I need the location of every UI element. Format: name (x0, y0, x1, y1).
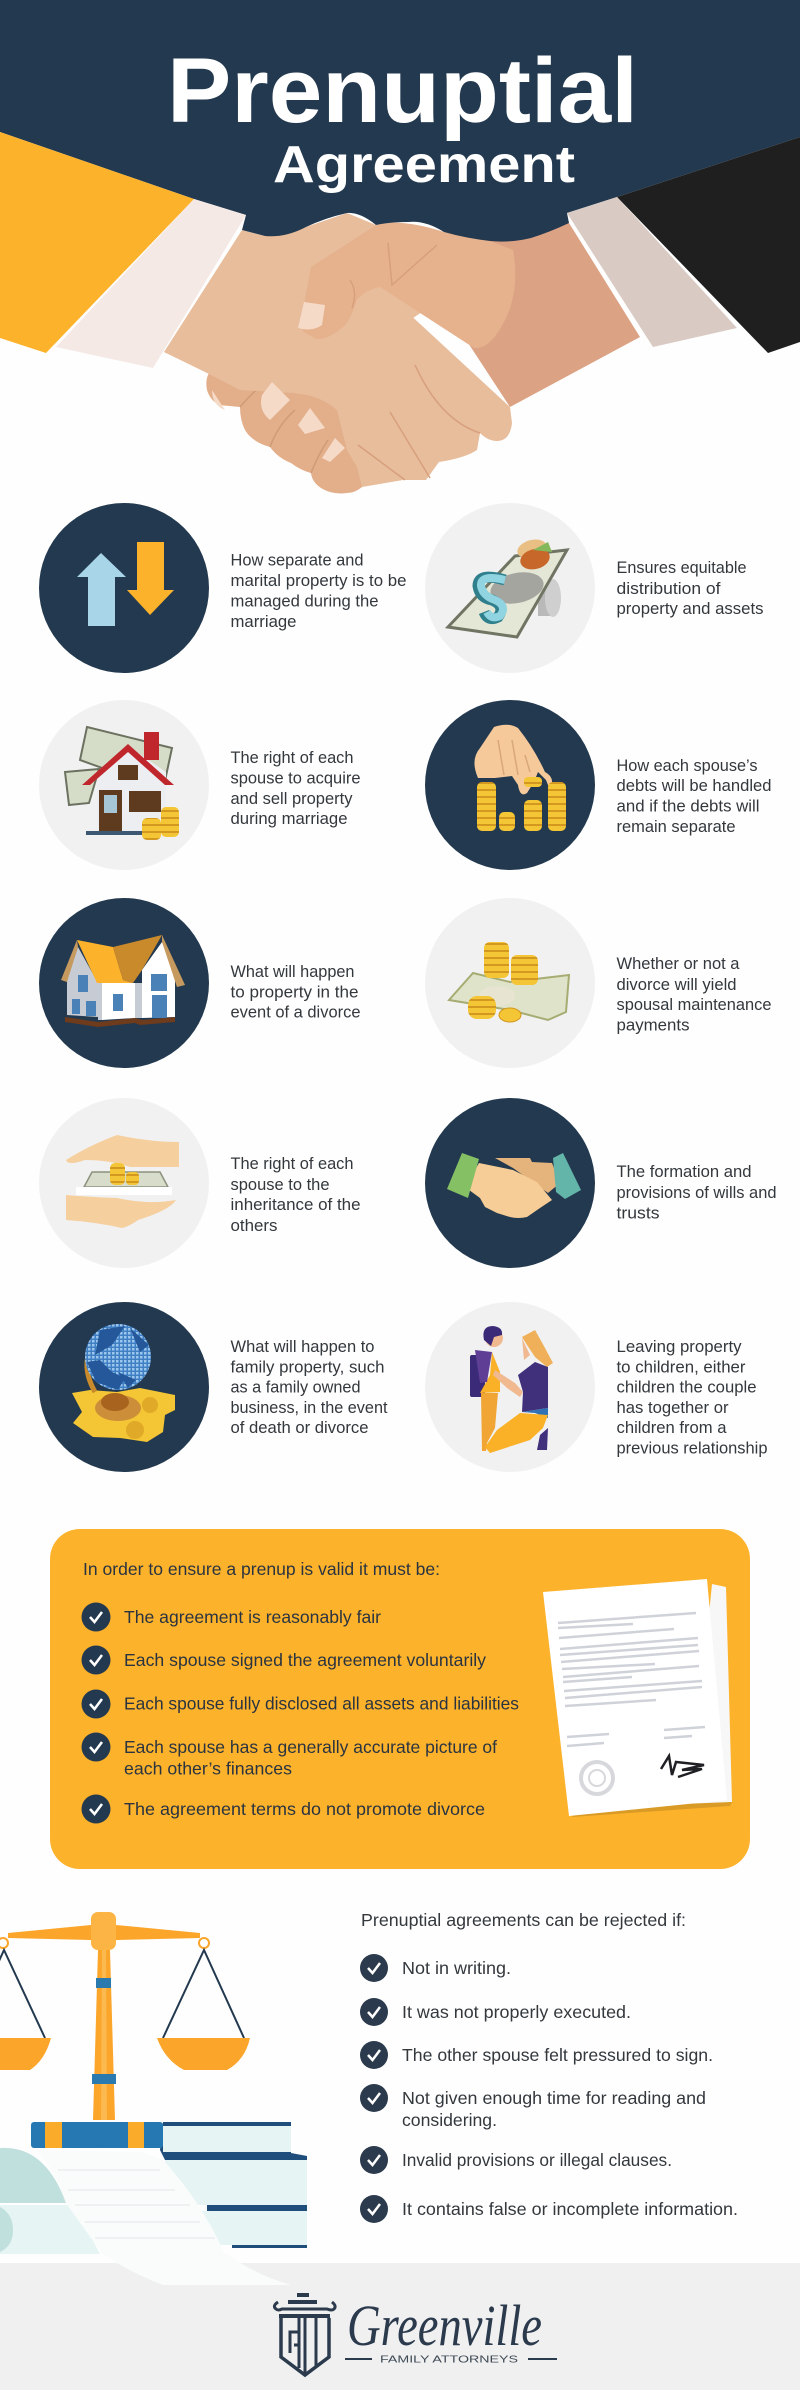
text: marital property is to be (230, 571, 406, 590)
check: accurate picture: each other’s finances (124, 1758, 292, 1778)
text: event of a divorce (230, 1002, 360, 1022)
grey cuff (567, 197, 737, 347)
text: spousal maintenance (616, 995, 772, 1014)
books (31, 2122, 307, 2248)
text: to children, either (616, 1358, 746, 1376)
company name: Greenville (347, 2293, 542, 2358)
text (230, 1154, 360, 1235)
teal backdrop (0, 2148, 66, 2203)
text: debts will be handled (616, 776, 772, 795)
right scale pan (157, 1938, 250, 2070)
hand crease lines (350, 243, 480, 480)
check: invalid provisions (360, 2146, 672, 2174)
check: not in writing: Not in writing. (402, 1958, 511, 1978)
icon: hand stacking coins (425, 700, 595, 870)
check: accurate picture (82, 1732, 497, 1778)
check: false information (360, 2195, 738, 2223)
right hand behind (301, 223, 515, 348)
left hand and wrist (164, 213, 440, 372)
item: acquire and sell property (39, 700, 360, 870)
icon: pillar (274, 2293, 335, 2376)
item: wills and trusts (425, 1098, 776, 1268)
check: not enough time (360, 2084, 706, 2130)
icon: hands protecting money (39, 1098, 209, 1268)
check: accurate picture: Each spouse has a generally accurate picture of (124, 1737, 497, 1757)
text: spouse to the (230, 1175, 330, 1194)
item: spouse debts (425, 700, 772, 870)
icon: mother and child (425, 1302, 595, 1472)
icon: money and dollar sign (425, 503, 595, 673)
panel: validity requirements (50, 1529, 750, 1869)
item: inheritance (39, 1098, 360, 1268)
text: How each spouse’s (616, 756, 758, 775)
yellow sleeve (0, 132, 194, 353)
text: business, in the event (230, 1398, 388, 1417)
text: children from a (616, 1418, 727, 1437)
text: to property in the (230, 982, 358, 1002)
text: family property, such (230, 1358, 384, 1376)
footer logo (274, 2293, 557, 2376)
text: What will happen (230, 962, 354, 981)
panel heading: In order to ensure a prenup is valid it must be: (83, 1559, 440, 1579)
text (616, 954, 772, 1034)
text: divorce will yield (616, 975, 736, 994)
text: What will happen to (230, 1337, 374, 1356)
right arm (440, 223, 640, 407)
navy header (0, 0, 800, 242)
item: managing property (39, 503, 406, 673)
check: disclosed (82, 1690, 519, 1718)
text: and if the debts will (616, 796, 760, 816)
text: as a family owned (230, 1378, 360, 1396)
left scale pan (0, 1938, 51, 2070)
front hand fingers (206, 373, 400, 493)
text: provisions of wills and (616, 1183, 776, 1202)
text: Leaving property (616, 1337, 742, 1356)
text (230, 748, 360, 828)
item: family property (39, 1302, 388, 1472)
check: not promote divorce (82, 1794, 485, 1824)
check: not enough time: Not given enough time for reading and (402, 2088, 706, 2108)
item: equitable distribution (425, 503, 764, 673)
check: reasonably fair (82, 1602, 381, 1632)
finger separations (240, 385, 328, 473)
title: Agreement (273, 136, 575, 194)
icon: cash and coins (425, 898, 595, 1068)
check: voluntarily: Each spouse signed the agreement voluntarily (124, 1650, 486, 1670)
text: How separate and (230, 550, 364, 570)
text: Ensures equitable (616, 558, 746, 577)
paper scroll (36, 2150, 291, 2285)
black sleeve (617, 137, 800, 353)
item: spousal maintenance (425, 898, 772, 1068)
text: others (230, 1216, 278, 1235)
check: not promote divorce: The agreement terms do not promote divorce (124, 1799, 485, 1819)
check: not in writing (360, 1954, 511, 1982)
icon: house with money (39, 700, 209, 870)
text (616, 558, 764, 618)
text (616, 1337, 768, 1458)
footer background (0, 2263, 800, 2390)
check: not properly executed (360, 1998, 631, 2026)
finger nails (212, 302, 345, 462)
text (616, 1162, 776, 1222)
title (167, 40, 638, 194)
icon: house (39, 898, 209, 1068)
text: The right of each (230, 1154, 354, 1173)
item: property in divorce (39, 898, 360, 1068)
check: pressured: The other spouse felt pressured to sign. (402, 2045, 713, 2065)
text (230, 550, 406, 631)
text: Whether or not a (616, 954, 740, 973)
icon: globe on gold coins (39, 1302, 209, 1472)
text: property and assets (616, 599, 764, 618)
check: voluntarily (82, 1646, 486, 1674)
icon: up and down arrows (39, 503, 209, 673)
text: The right of each (230, 748, 354, 767)
text: spouse to acquire (230, 768, 360, 788)
section heading: Prenuptial agreements can be rejected if: (361, 1910, 686, 1930)
header: handshake illustration (0, 0, 800, 493)
icon: handshake (425, 1098, 595, 1268)
text (616, 756, 772, 836)
text: remain separate (616, 817, 736, 836)
text: managed during the (230, 592, 378, 610)
check: reasonably fair: The agreement is reasonably fair (124, 1607, 381, 1627)
text: The formation and (616, 1162, 752, 1181)
front hand palm (164, 287, 512, 487)
text: children the couple (616, 1378, 756, 1396)
text: during marriage (230, 809, 348, 828)
text: previous relationship (616, 1438, 768, 1458)
item: property to children (425, 1302, 768, 1472)
tagline: FAMILY ATTORNEYS (380, 2354, 518, 2366)
text (230, 962, 360, 1022)
panel: rejection reasons (360, 1910, 738, 2223)
white cuff (56, 199, 246, 368)
title: Prenuptial (167, 40, 638, 142)
scale stand (8, 1912, 200, 2120)
check: not properly executed: It was not properly executed. (402, 2002, 631, 2022)
text (230, 1337, 388, 1437)
check: invalid provisions: Invalid provisions or illegal clauses. (402, 2150, 672, 2170)
text: distribution of (616, 579, 721, 598)
text: and sell property (230, 789, 353, 808)
text: payments (616, 1016, 690, 1034)
icon: signed document (543, 1579, 732, 1817)
text: of death or divorce (230, 1418, 368, 1437)
check: not enough time: considering. (402, 2110, 497, 2130)
text: trusts (616, 1204, 660, 1222)
scales of justice illustration (0, 1912, 800, 2390)
text: marriage (230, 612, 296, 631)
text: inheritance of the (230, 1195, 360, 1214)
check: false information: It contains false or incomplete information. (402, 2199, 738, 2219)
check: pressured (360, 2041, 713, 2069)
check: disclosed: Each spouse fully disclosed all assets and liabilities (124, 1694, 519, 1714)
text: has together or (616, 1398, 729, 1417)
